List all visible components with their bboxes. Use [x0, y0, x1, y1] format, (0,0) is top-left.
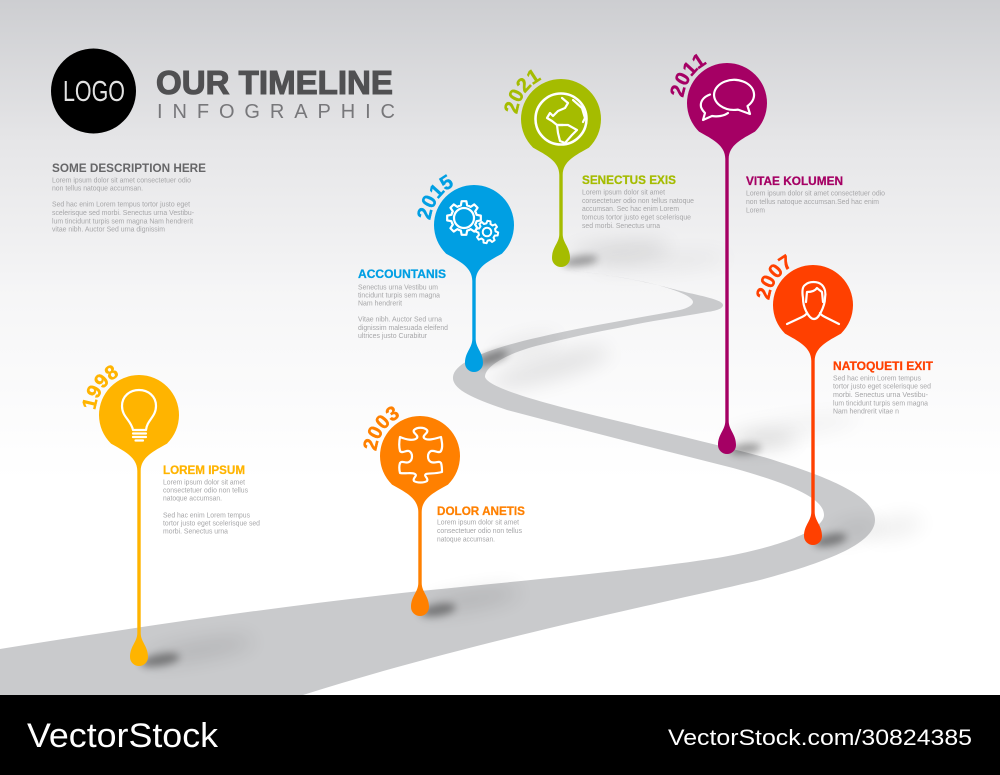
year 2021: 2021	[504, 69, 542, 114]
pin 2003	[363, 406, 525, 616]
text: senectus exis	[582, 173, 694, 230]
text: accountanis	[358, 267, 448, 340]
text: vitae kolumen: non tellus natoque accumsan.Sed hac enim	[746, 199, 879, 206]
text: dolor anetis: natoque accumsan.	[437, 536, 495, 544]
pin 2011	[670, 54, 885, 454]
icon: light bulb	[122, 390, 156, 440]
text: dolor anetis: DOLOR ANETIS	[437, 504, 525, 518]
text: natoqueti exit: lum tincidunt turpis sem magna	[833, 400, 928, 408]
text: accountanis: ACCOUNTANIS	[358, 267, 446, 281]
text: accountanis: tincidunt turpis sem magna	[358, 293, 440, 300]
text: accountanis: Vitae nibh. Auctor Sed urna	[358, 316, 442, 324]
text: vitae kolumen: Lorem ipsum dolor sit amet consectetuer odio	[746, 190, 885, 198]
intro text block: vitae nibh. Auctor Sed urna dignissim	[52, 227, 165, 234]
text: lorem ipsum	[163, 463, 260, 536]
pin shadows	[139, 240, 882, 669]
title	[156, 64, 395, 123]
text: lorem ipsum: consectetuer odio non tellus	[163, 488, 248, 494]
text: senectus exis: SENECTUS EXIS	[582, 173, 676, 187]
text: senectus exis: consectetuer odio non tellus natoque	[582, 198, 694, 205]
text: vitae kolumen: VITAE KOLUMEN	[746, 174, 843, 188]
intro text block: SOME DESCRIPTION HERE	[52, 161, 206, 175]
icon: puzzle piece	[399, 428, 442, 482]
watermark bar: VectorStock	[27, 717, 219, 755]
text: accountanis: ultrices justo Curabitur	[358, 333, 428, 340]
text: senectus exis: Lorem ipsum dolor sit amet	[582, 190, 665, 196]
intro text block: Lorem ipsum dolor sit amet consectetuer odio	[52, 178, 191, 184]
year 2015: 2015	[417, 174, 453, 220]
text: natoqueti exit: morbi. Senectus urna Vestibu-	[833, 392, 929, 399]
text: lorem ipsum: morbi. Senectus urna	[163, 528, 228, 536]
road soft shadows	[487, 249, 924, 542]
year 1998: 1998	[82, 365, 118, 410]
text: natoqueti exit: NATOQUETI EXIT	[833, 359, 934, 373]
logo	[51, 48, 136, 134]
text: vitae kolumen	[746, 174, 885, 214]
logo: LOGO	[63, 76, 125, 108]
text: natoqueti exit: Sed hac enim Lorem tempus	[833, 376, 921, 382]
text: lorem ipsum: natoque accumsan.	[163, 496, 222, 502]
text: senectus exis: accumsan. Sec hac enim Lorem	[582, 206, 679, 213]
watermark bar	[0, 695, 1000, 775]
icon: gears	[447, 201, 499, 244]
text: natoqueti exit	[833, 359, 934, 416]
text: natoqueti exit: Nam hendrerit vitae n	[833, 408, 899, 416]
text: accountanis: dignissim malesuada eleifend	[358, 325, 448, 332]
text: lorem ipsum: tortor justo eget scelerisque sed	[163, 520, 260, 528]
text: lorem ipsum: Sed hac enim Lorem tempus	[163, 512, 250, 520]
text: natoqueti exit: tortor justo eget scelerisque sed	[833, 384, 931, 390]
text: lorem ipsum: LOREM IPSUM	[163, 463, 245, 477]
pin 2015	[358, 174, 514, 372]
year 2011: 2011	[670, 54, 707, 98]
background	[0, 0, 1000, 480]
year 2007: 2007	[756, 254, 790, 300]
winding road	[0, 270, 875, 695]
text: lorem ipsum: Lorem ipsum dolor sit amet	[163, 480, 245, 486]
intro text block	[52, 161, 206, 234]
icon: speech bubbles	[701, 80, 754, 120]
year 2003: 2003	[363, 406, 399, 451]
text: senectus exis: sed morbi. Senectus urna	[582, 223, 660, 230]
title: OUR TIMELINE	[156, 64, 393, 101]
icon: globe	[536, 94, 586, 144]
text: dolor anetis: Lorem ipsum dolor sit amet	[437, 520, 519, 526]
intro text block: scelerisque sed morbi. Senectus urna Vestibu-	[52, 210, 195, 217]
pin 1998	[82, 365, 260, 666]
intro text block: lum tincidunt turpis sem magna Nam hendrerit	[52, 218, 193, 225]
icon: person	[787, 282, 839, 324]
text: dolor anetis	[437, 504, 525, 544]
title: INFOGRAPHIC	[157, 101, 395, 123]
text: accountanis: Nam hendrerit	[358, 300, 402, 308]
intro text block: Sed hac enim Lorem tempus tortor justo eget	[52, 202, 190, 209]
watermark bar: VectorStock.com/30824385	[668, 725, 972, 750]
intro text block: non tellus natoque accumsan.	[52, 186, 143, 192]
text: senectus exis: tomcus tortor justo eget scelerisque	[582, 214, 691, 222]
pin 2007	[756, 254, 934, 545]
text: vitae kolumen: Lorem	[746, 208, 765, 214]
text: accountanis: Senectus urna Vestibu um	[358, 284, 438, 292]
text: dolor anetis: consectetuer odio non tellus	[437, 528, 522, 535]
pin 2021	[504, 69, 694, 267]
